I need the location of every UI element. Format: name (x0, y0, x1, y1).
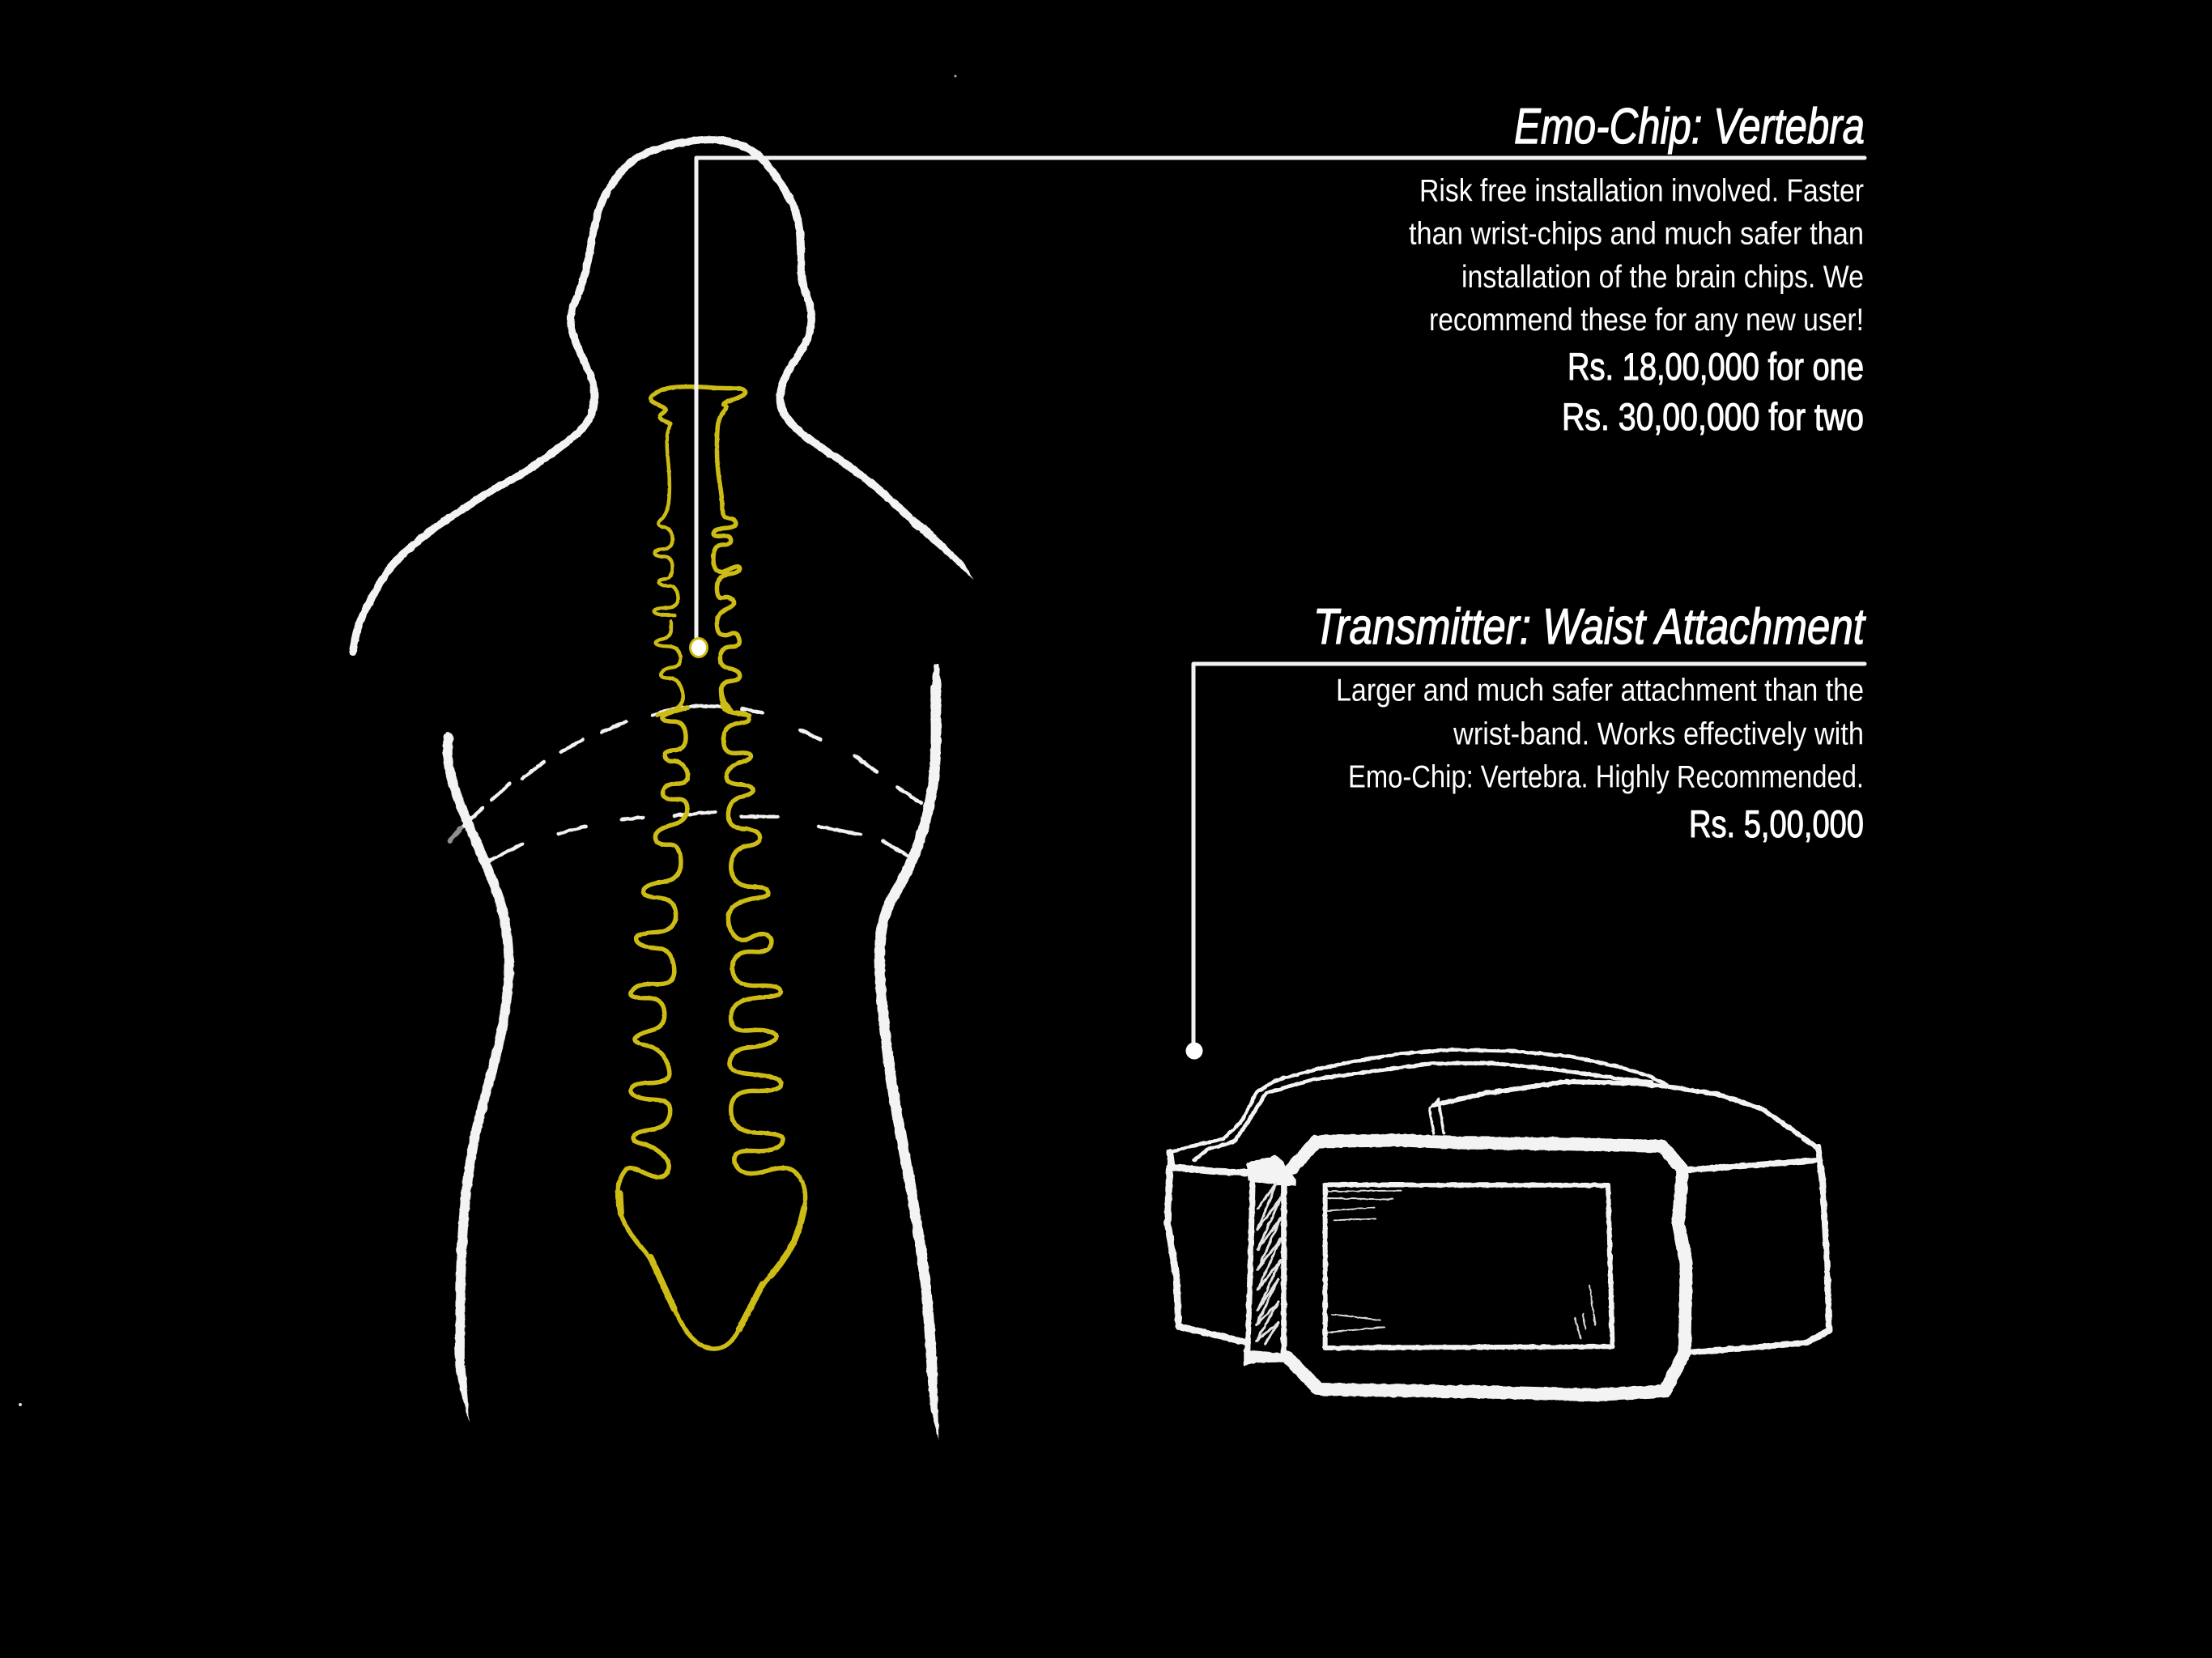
spine lower section and sacrum (618, 688, 806, 1349)
prices (1562, 345, 1864, 438)
left torso outline (448, 738, 508, 1422)
description (1409, 173, 1864, 338)
dashed waist lines (450, 706, 921, 862)
text block: Transmitter Waist Attachment (1313, 599, 1866, 845)
heading: Emo-Chip: Vertebra (1514, 99, 1865, 155)
spine: yellow vertebrae (618, 387, 806, 1349)
leader line: transmitter (1185, 664, 1865, 1059)
price: Rs. 5,00,000 (1689, 802, 1864, 845)
text block: Emo-Chip Vertebra (1409, 99, 1865, 438)
chip marker dot (690, 638, 708, 657)
human figure sketch (353, 139, 974, 1439)
transmitter marker dot (1185, 1043, 1203, 1059)
description: Larger and much safer attachment than the (1336, 674, 1864, 708)
description: wrist-band. Works effectively with (1453, 717, 1864, 751)
description: installation of the brain chips. We (1461, 260, 1864, 295)
transmitter waist attachment sketch (1168, 1050, 1829, 1395)
buckle with hatching (1244, 1155, 1299, 1370)
right torso outline (879, 664, 942, 1439)
transmitter body outline (1287, 1140, 1687, 1395)
leader line: vertebra chip (690, 158, 1865, 657)
prices: Rs. 18,00,000 for one (1568, 345, 1864, 388)
head and shoulders outline (353, 139, 974, 652)
heading: Transmitter: Waist Attachment (1313, 599, 1866, 655)
description: Risk free installation involved. Faster (1419, 173, 1864, 209)
transmitter screen (1325, 1184, 1613, 1348)
prices: Rs. 30,00,000 for two (1562, 395, 1864, 438)
description (1336, 674, 1864, 795)
description: than wrist-chips and much safer than (1409, 217, 1864, 251)
waist strap and band (1168, 1050, 1829, 1352)
description: Emo-Chip: Vertebra. Highly Recommended. (1348, 759, 1864, 795)
description: recommend these for any new user! (1429, 303, 1864, 338)
spine upper section (651, 387, 749, 716)
